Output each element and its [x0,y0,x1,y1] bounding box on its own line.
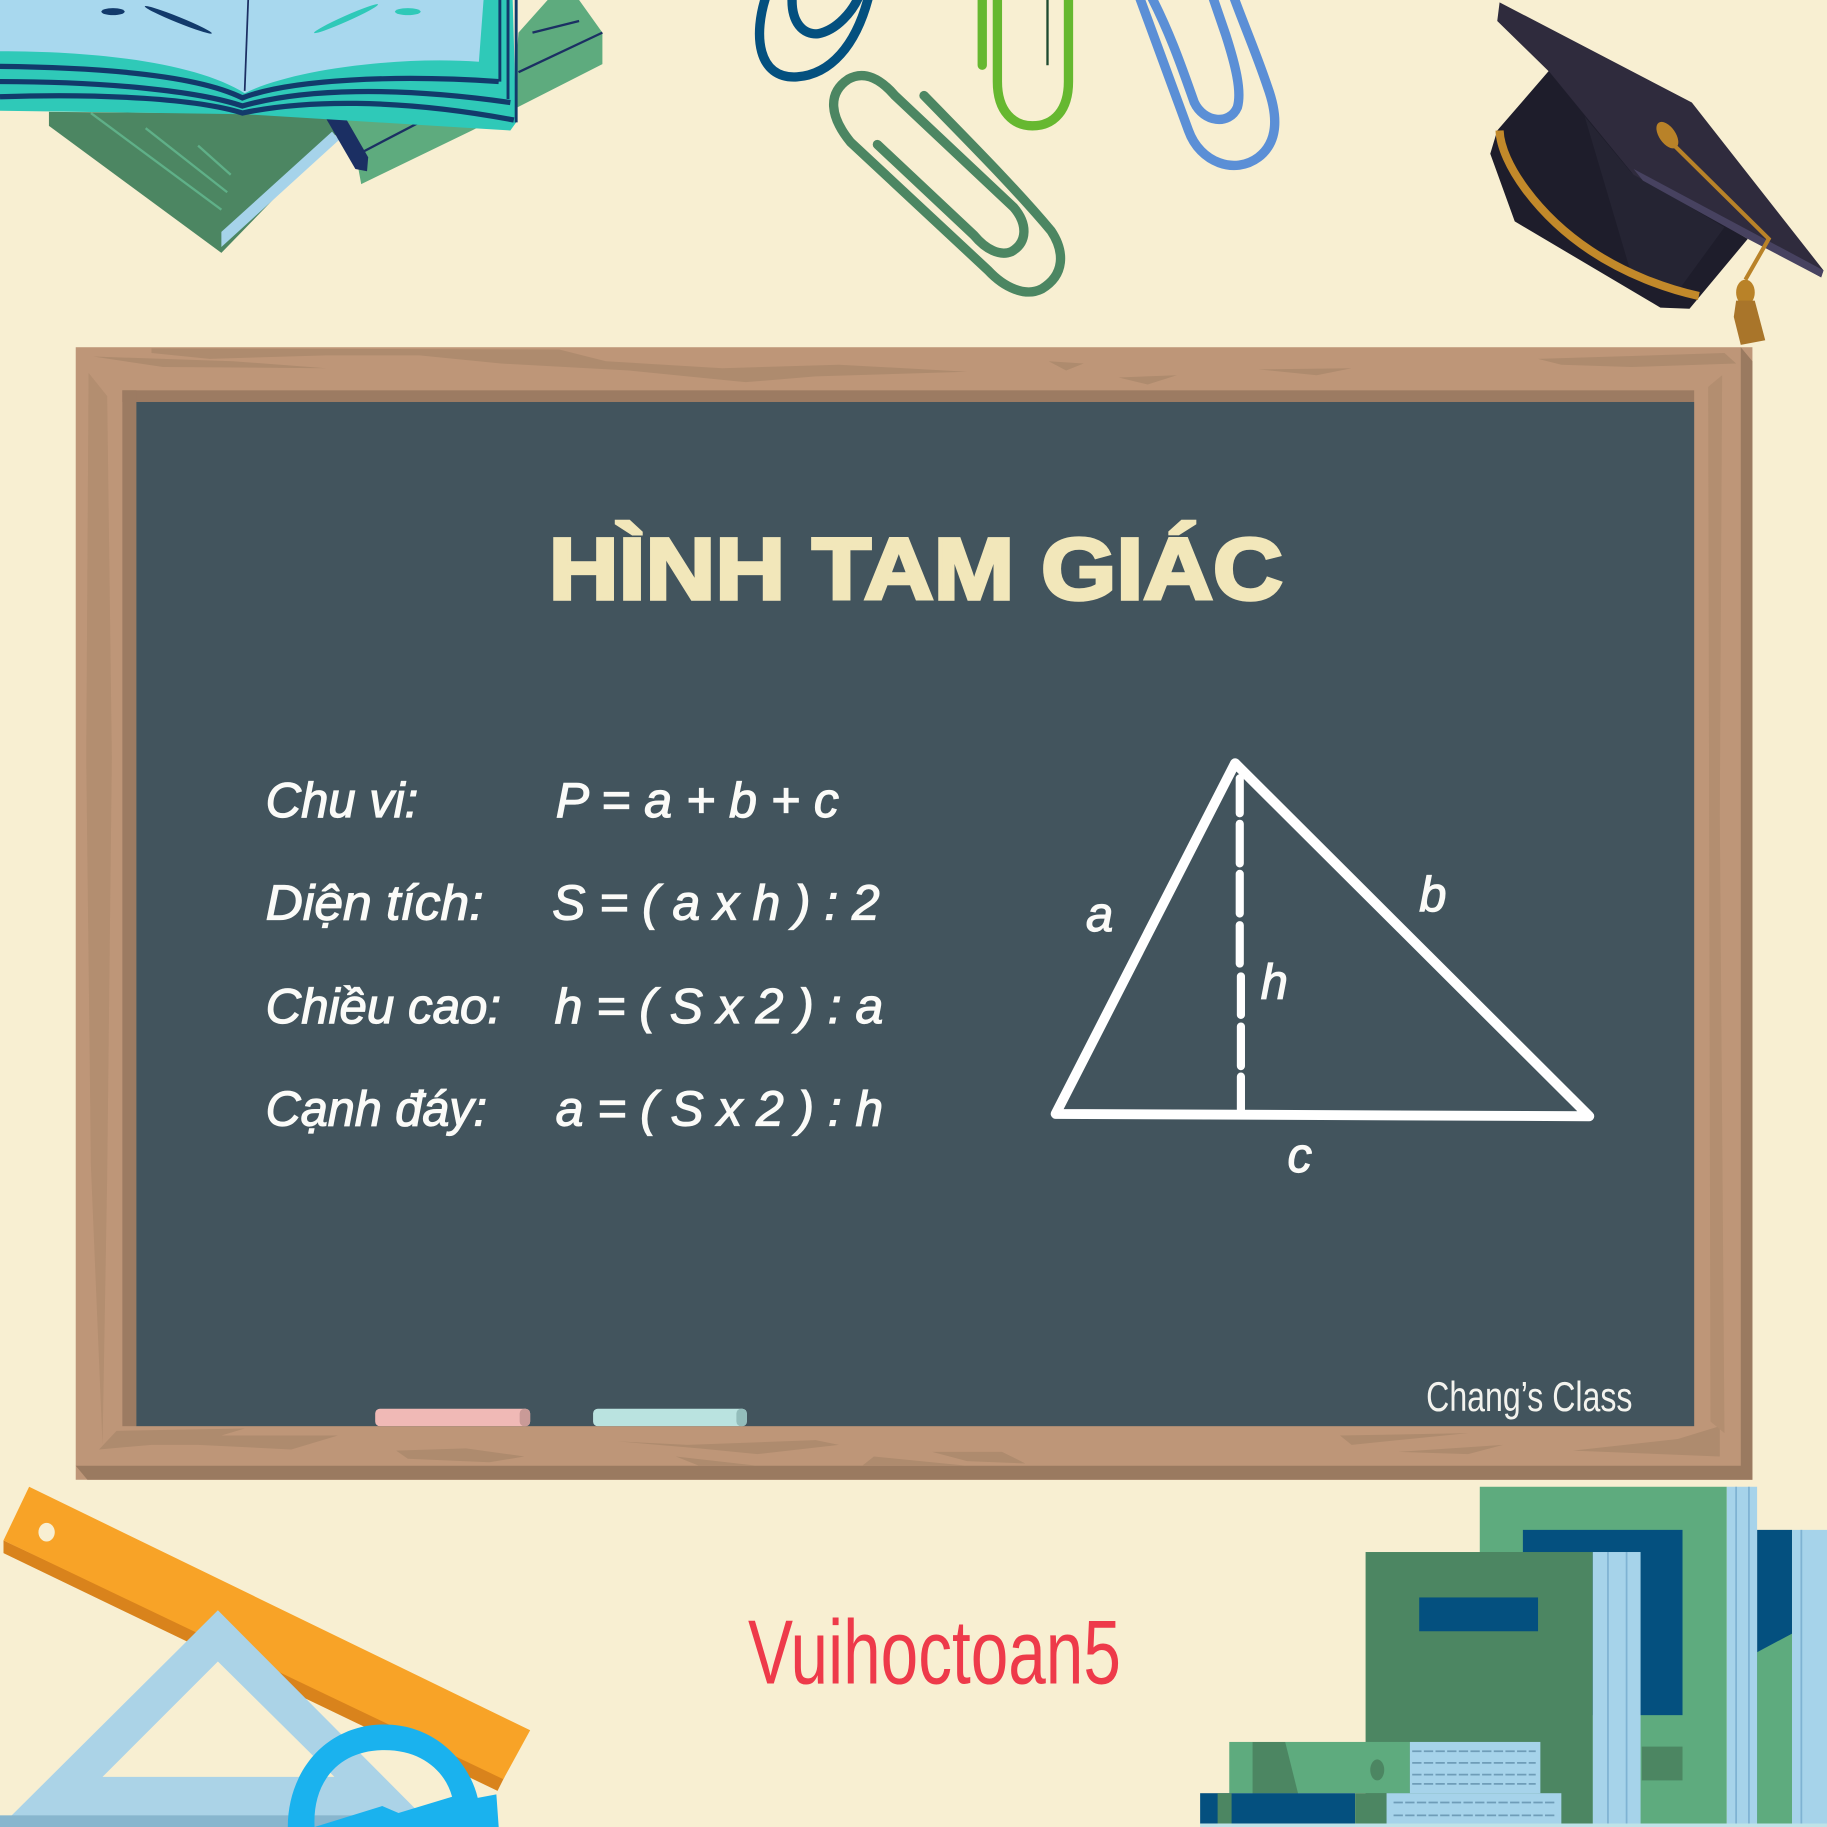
small upper book [1229,1742,1540,1793]
formula: perimeter: P = a + b + c [556,774,839,828]
icon: protractor [288,1724,499,1827]
formula: height: Chiều cao: [266,980,501,1034]
formula: base: Cạnh đáy: [266,1083,487,1137]
icon: stack of open books [0,0,602,253]
icon: set square [0,1610,433,1827]
front book [1366,1552,1641,1827]
formula: height: h = ( S x 2 ) : a [555,980,883,1034]
formula: area: Diện tích: [266,876,484,930]
triangle diagram [1056,763,1589,1183]
formula: perimeter [266,774,839,828]
signature: Chang’s Class [1426,1373,1632,1420]
back book [1480,1487,1757,1827]
brand name: Vuihoctoan5 [748,1603,1121,1704]
formula: perimeter: Chu vi: [266,774,418,828]
formula: area [266,876,880,930]
side labels: b [1419,868,1446,922]
formula: height [266,980,883,1034]
side labels: h [1261,956,1288,1010]
chalk: teal [593,1409,747,1426]
icon: stack of books [1200,1487,1827,1827]
icon: ruler [3,1487,530,1791]
icon: bright green paperclip [982,0,1068,126]
formula: base: a = ( S x 2 ) : h [556,1083,883,1137]
icon: graduation cap [1490,2,1824,345]
small lower book [1200,1793,1827,1827]
side labels [1086,868,1446,1183]
icon: light blue paperclip [1138,0,1275,165]
formula: area: S = ( a x h ) : 2 [552,876,880,930]
side labels: a [1086,888,1113,942]
chalk: pink [375,1409,530,1426]
icon: dark blue paperclip [760,0,869,77]
far right book [1757,1530,1827,1827]
wooden frame [76,347,1752,1480]
board surface [136,402,1694,1426]
panel: chalkboard [76,347,1752,1480]
title: HÌNH TAM GIÁC [549,520,1283,618]
side labels: c [1288,1129,1312,1183]
formula: base [266,1083,883,1137]
icon: large green paperclip [834,76,1061,292]
